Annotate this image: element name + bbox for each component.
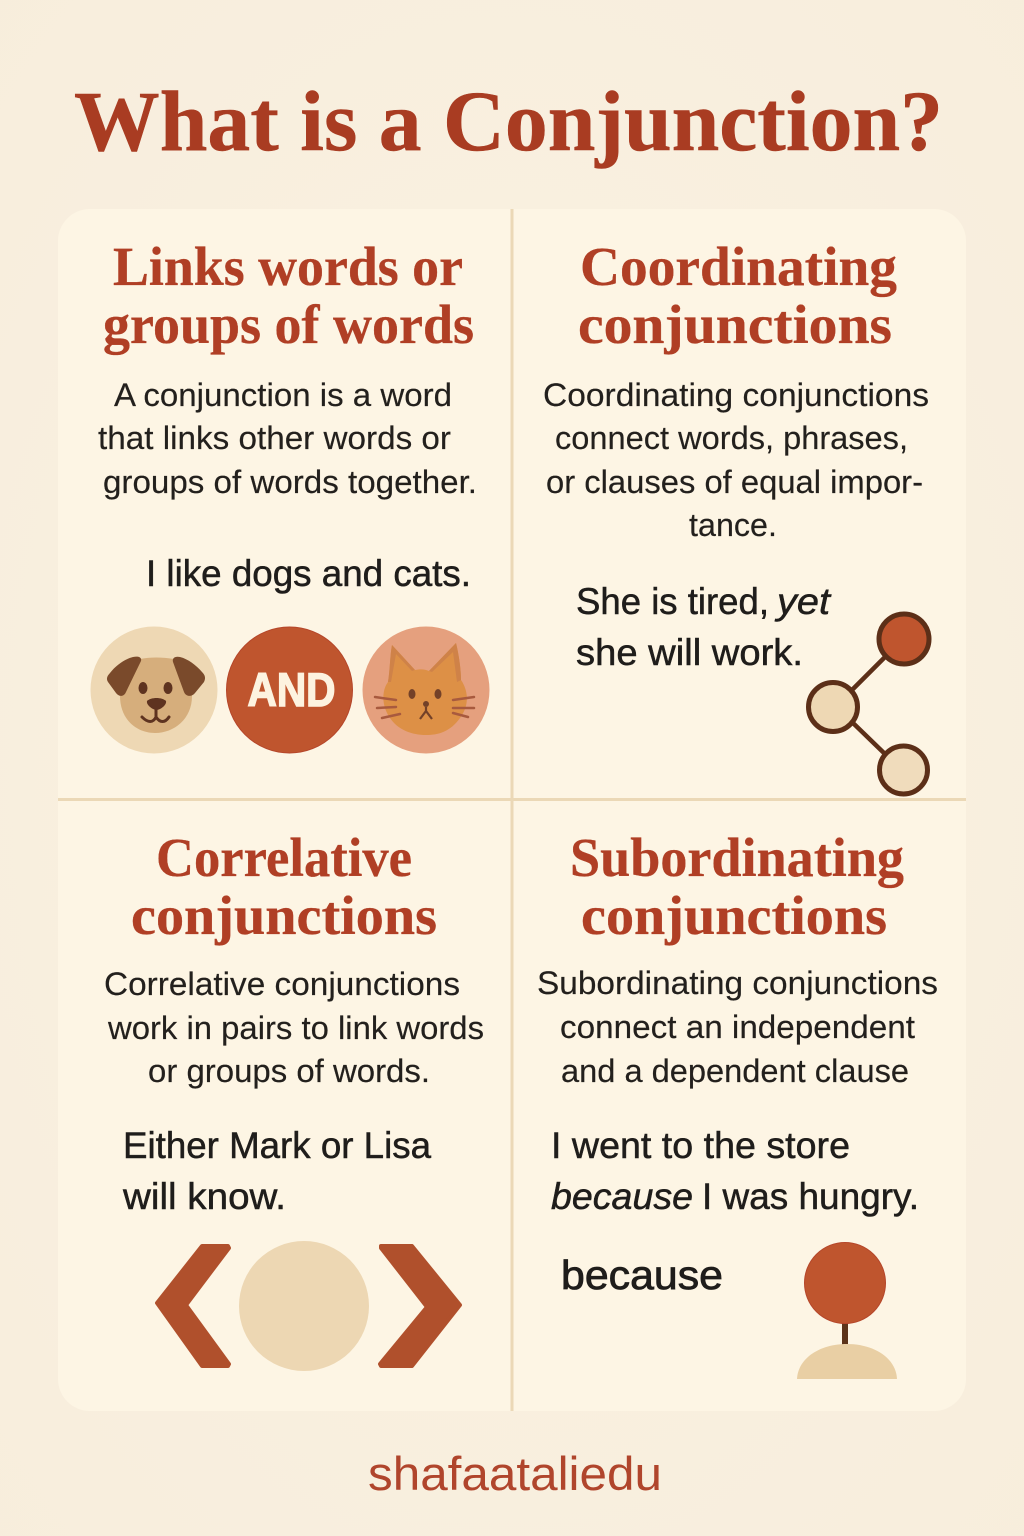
text: links definition: that links other words or (98, 420, 451, 456)
icon: circle on stem and dome (797, 1242, 897, 1379)
label: because: because (561, 1252, 723, 1298)
example sentence: dogs and cats: I like dogs and cats. (146, 553, 471, 594)
text: coordinating definition: or clauses of equal impor- (546, 464, 923, 500)
text: subordinating definition: connect an independent (560, 1009, 915, 1045)
text: subordinating definition (537, 965, 938, 1089)
footer: shafaataliedu: shafaataliedu (368, 1447, 662, 1500)
heading: coordinating (578, 236, 897, 355)
card background (58, 209, 966, 1411)
panel: coordinating (543, 236, 929, 794)
heading: coordinating: conjunctions (578, 294, 892, 355)
heading: coordinating: Coordinating (580, 236, 897, 297)
text: coordinating definition: Coordinating conjunctions (543, 377, 929, 413)
text: subordinating definition: and a dependent clause (561, 1053, 909, 1089)
text: links definition: groups of words together. (103, 464, 477, 500)
panel: correlative (104, 827, 484, 1371)
example sentence: tired yet work: she will work. (576, 632, 803, 673)
icon: AND badge (226, 627, 352, 753)
icon: dog (90, 626, 218, 754)
example sentence: store because hungry: I went to the store (551, 1125, 850, 1166)
example sentence: tired yet work (576, 581, 832, 673)
text: subordinating definition: Subordinating conjunctions (537, 965, 938, 1001)
heading: correlative (131, 827, 437, 946)
text: coordinating definition (543, 377, 929, 543)
text: coordinating definition: connect words, phrases, (555, 420, 908, 456)
example sentence: tired yet work: yet (774, 581, 832, 622)
text: links definition (98, 377, 477, 500)
text: correlative definition (104, 966, 484, 1089)
text: links definition: A conjunction is a word (114, 377, 452, 413)
heading: links words (103, 236, 474, 355)
example sentence: store because hungry: because (551, 1176, 693, 1217)
panel: subordinating (537, 827, 938, 1379)
example sentence: either or (122, 1125, 431, 1217)
text: correlative definition: Correlative conjunctions (104, 966, 460, 1002)
text: correlative definition: work in pairs to link words (107, 1010, 484, 1046)
panel: links words (90, 236, 490, 754)
icon: branching nodes (808, 614, 929, 794)
title: What is a Conjunction? (74, 73, 943, 169)
icon: cat (362, 626, 490, 754)
example sentence: either or: Either Mark or Lisa (123, 1125, 431, 1166)
example sentence: tired yet work: She is tired, (576, 581, 769, 622)
example sentence: store because hungry: I was hungry. (702, 1176, 919, 1217)
example sentence: store because hungry (551, 1125, 919, 1217)
heading: subordinating (570, 827, 904, 946)
heading: correlative: Correlative (156, 827, 412, 888)
heading: correlative: conjunctions (131, 885, 437, 946)
icon: AND badge: AND (248, 663, 336, 716)
text: correlative definition: or groups of words. (148, 1053, 430, 1089)
heading: links words: Links words or (113, 236, 463, 297)
heading: subordinating: conjunctions (581, 885, 887, 946)
icon: paired chevrons and circle (157, 1241, 460, 1371)
text: coordinating definition: tance. (689, 507, 777, 543)
heading: subordinating: Subordinating (570, 827, 904, 888)
heading: links words: groups of words (103, 294, 474, 355)
example sentence: either or: will know. (122, 1176, 286, 1217)
